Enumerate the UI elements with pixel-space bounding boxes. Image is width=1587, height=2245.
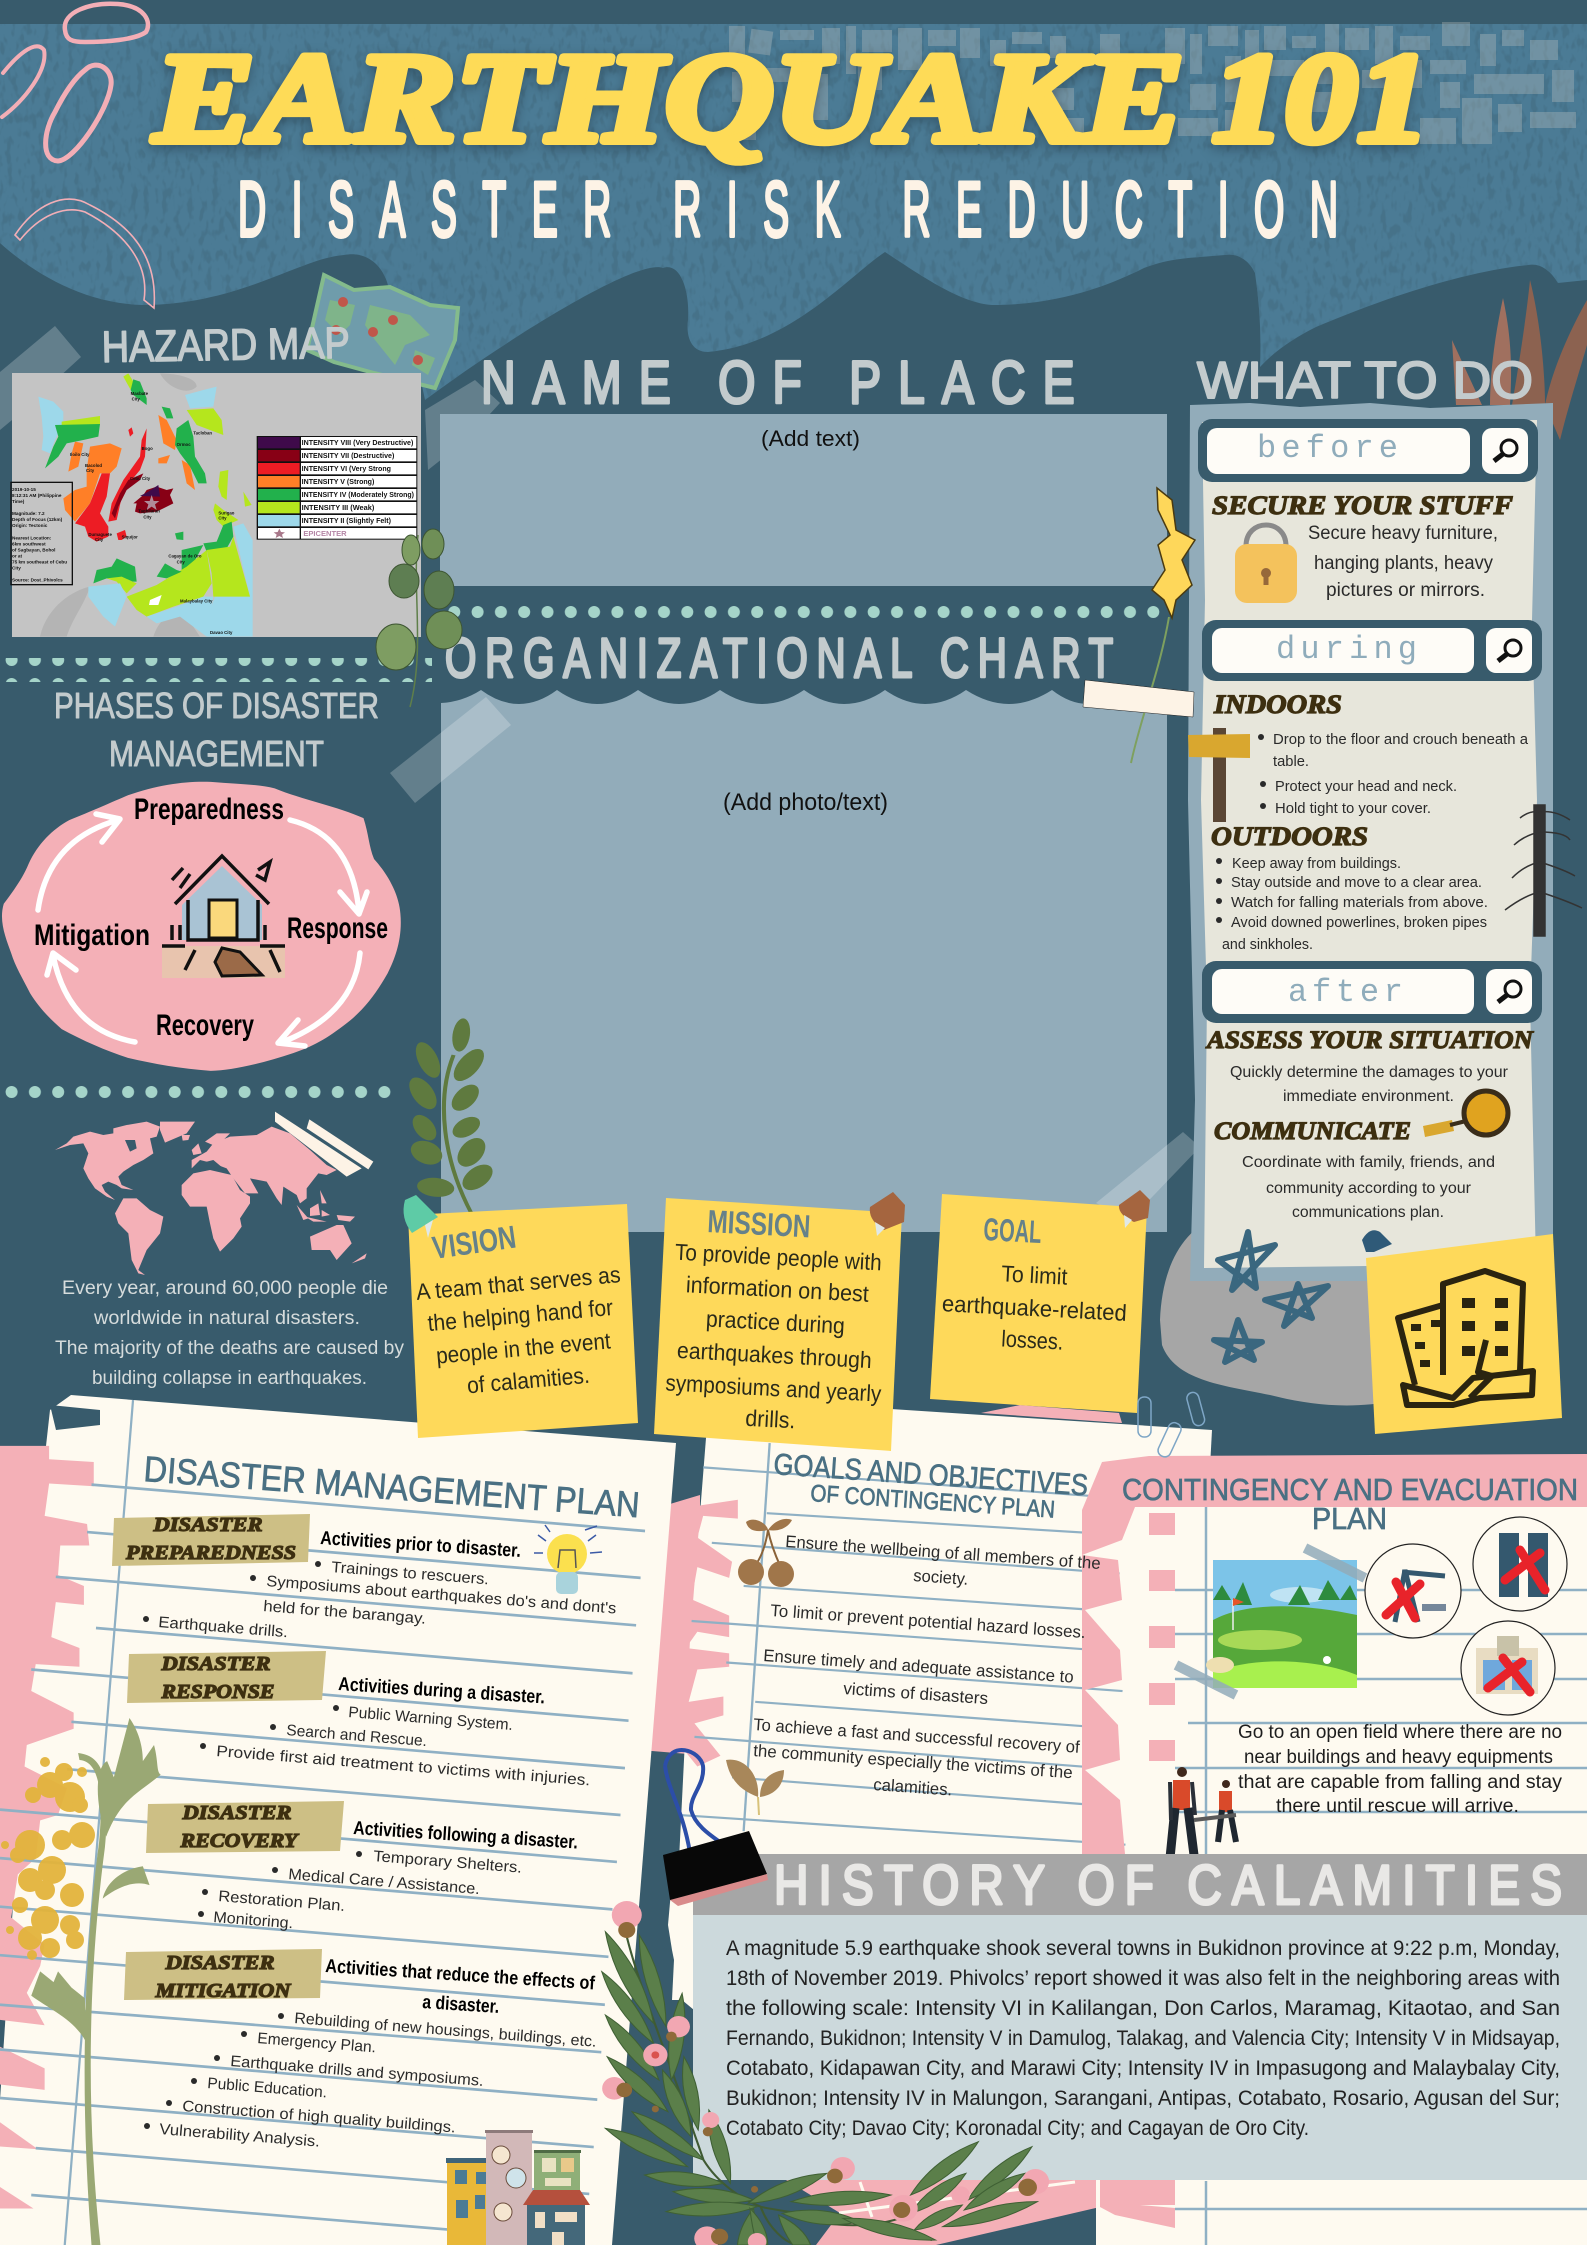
- icon: no palace building: [1461, 1621, 1555, 1715]
- activity headings: [320, 1528, 596, 2018]
- hazard map figure: EPICENTER: [303, 531, 347, 538]
- title: EARTHQUAKE: [153, 27, 1184, 169]
- phases diagram: [2, 782, 401, 1071]
- activity lists: Restoration Plan.: [218, 1888, 346, 1915]
- goals text: calamities.: [873, 1775, 953, 1800]
- phase labels: Preparedness: [134, 793, 284, 826]
- note: vision: people in the event: [435, 1327, 612, 1369]
- panel: history of calamities: [693, 1854, 1587, 2180]
- hazard map figure: Bacolod: [85, 463, 102, 468]
- cycle arrows: [38, 814, 367, 1046]
- search bar: before: before: [1257, 430, 1398, 467]
- hazard map figure: Malaybalay City: [180, 599, 213, 604]
- text: history body: A magnitude 5.9 earthquake shook several towns in Bukidnon province at 9:22 p.m, Monday,: [726, 1937, 1560, 1960]
- hazard map figure: [11, 373, 421, 637]
- text: communicate: communications plan.: [1292, 1204, 1444, 1221]
- search bar: before: [1198, 419, 1538, 482]
- activity headings: Activities that reduce the effects of: [325, 1956, 596, 1994]
- text: every year: building collapse in earthquakes.: [92, 1368, 367, 1389]
- heading: communicate: COMMUNICATE: [1214, 1118, 1411, 1145]
- note: mission: symposiums and yearly: [665, 1369, 882, 1407]
- icon: signpost: [1188, 728, 1250, 822]
- label: response: RESPONSE: [160, 1681, 274, 1703]
- search bar: during: [1202, 620, 1542, 681]
- text: evacuation instructions: Go to an open field where there are no: [1238, 1722, 1562, 1743]
- heading: goals and objectives: [773, 1448, 1089, 1524]
- torn cream strip beside history panel: [668, 1880, 700, 2015]
- paper clips: [1138, 1391, 1206, 1459]
- hazard map figure: 2019-10-15: [12, 487, 36, 492]
- activity lists: Earthquake drills and symposiums.: [230, 2053, 484, 2090]
- hazard map figure: Davao City: [210, 630, 233, 635]
- list: outdoors: Avoid downed powerlines, broken pipes: [1231, 914, 1487, 931]
- list: outdoors: Keep away from buildings.: [1232, 855, 1401, 872]
- pink torn edge: [680, 1443, 1125, 1845]
- heading: indoors: INDOORS: [1213, 690, 1342, 719]
- note: mission: information on best: [685, 1271, 870, 1307]
- text: evacuation instructions: there until rescue will arrive.: [1276, 1796, 1519, 1817]
- pin: brown: [1119, 1190, 1150, 1228]
- search bar: during: during: [1276, 631, 1417, 668]
- header wave band: [0, 24, 1587, 400]
- label: recovery: DISASTER: [181, 1802, 292, 1824]
- heading: hazard map: HAZARD MAP: [101, 319, 350, 372]
- hazard map figure: Tagbilaran: [138, 508, 160, 513]
- hazard map figure: City: [143, 515, 152, 520]
- activity lists: Public Warning System.: [348, 1704, 514, 1734]
- list: indoors: Hold tight to your cover.: [1275, 800, 1431, 817]
- note: goal: To limit: [1001, 1260, 1069, 1290]
- goals text: the community especially the victims of the: [753, 1741, 1073, 1782]
- hazard map figure: Cebu City: [130, 476, 151, 481]
- activity headings: Activities prior to disaster.: [320, 1528, 522, 1562]
- eucalyptus sprig near map: [376, 529, 462, 707]
- activity lists: Earthquake drills.: [158, 1614, 289, 1641]
- hazard map figure: City: [95, 537, 104, 542]
- list: outdoors: Stay outside and move to a clear area.: [1231, 874, 1482, 891]
- title: [153, 27, 1430, 169]
- text: assess: Quickly determine the damages to your: [1230, 1064, 1509, 1081]
- hazard map figure: 75 km southeast of Cebu: [12, 559, 67, 564]
- hazard map figure: Masbate: [131, 391, 149, 396]
- goals text: [753, 1532, 1101, 1800]
- hazard map figure: City: [218, 515, 227, 520]
- heading: organizational chart: ORGANIZATIONAL CHART: [445, 628, 1113, 690]
- goals text: To achieve a fast and successful recovery of: [753, 1715, 1081, 1757]
- activity headings: Activities during a disaster.: [338, 1674, 546, 1708]
- hazard map figure: City: [86, 468, 95, 473]
- note: goal: [930, 1190, 1150, 1413]
- hazard map figure: of Sagbayan, Bohol: [12, 547, 55, 552]
- text: history body: the following scale: Intensity VI in Kalilangan, Don Carlos, Maramag, Kitaotao, and San: [726, 1997, 1560, 2020]
- phase labels: Mitigation: [34, 919, 150, 952]
- hazard map figure: 8:12:31 AM (Philippine: [12, 493, 62, 498]
- hazard map figure: INTENSITY V (Strong): [302, 479, 374, 486]
- note: mission: To provide people with: [674, 1239, 882, 1275]
- activity lists: Monitoring.: [213, 1909, 294, 1932]
- activity lists: held for the barangay.: [263, 1598, 427, 1628]
- list: indoors: Protect your head and neck.: [1275, 778, 1457, 795]
- label: recovery: RECOVERY: [179, 1830, 299, 1852]
- pink strip behind middle paper: [640, 1495, 700, 1755]
- activity lists: Provide first aid treatment to victims with injuries.: [216, 1743, 591, 1789]
- search bar: after: after: [1288, 974, 1403, 1011]
- note: vision: the helping hand for: [427, 1294, 614, 1336]
- goals text: society.: [913, 1566, 969, 1589]
- icon: no tall buildings: [1473, 1517, 1567, 1611]
- text: communicate: community according to your: [1266, 1180, 1472, 1197]
- note: mission: MISSION: [707, 1203, 811, 1244]
- illustration: houses: [446, 2130, 590, 2245]
- text: evacuation instructions: [1238, 1722, 1563, 1817]
- hazard map figure: 6km southwest: [12, 541, 46, 546]
- list: indoors: [1258, 731, 1529, 817]
- lower right paper and pink: [786, 2180, 1587, 2245]
- text: evacuation instructions: near buildings and heavy equipments: [1244, 1747, 1553, 1768]
- hazard map figure: INTENSITY IV (Moderately Strong): [302, 492, 414, 499]
- activity lists: Construction of high quality buildings.: [182, 2098, 456, 2136]
- activity lists: Symposiums about earthquakes do's and dont's: [266, 1573, 617, 1618]
- activity lists: Temporary Shelters.: [373, 1848, 523, 1877]
- label: preparedness: PREPAREDNESS: [125, 1542, 296, 1564]
- hazard map figure: Nearest Location:: [12, 535, 52, 540]
- note: vision: VISION: [430, 1219, 518, 1266]
- label: preparedness: [112, 1514, 310, 1566]
- note: goal: losses.: [1001, 1325, 1064, 1355]
- panel: organizational chart: (Add photo/text): [723, 789, 888, 816]
- heading: goals and objectives: OF CONTINGENCY PLAN: [810, 1480, 1056, 1524]
- illustration: open field: [1206, 1560, 1357, 1688]
- hazard map figure: Origin: Tectonic: [12, 523, 48, 528]
- wheat sprig and stem: [1131, 488, 1195, 763]
- torn pink edge: [0, 1400, 645, 2245]
- hazard map figure: INTENSITY VI (Very Strong: [302, 466, 391, 473]
- goals text: Ensure timely and adequate assistance to: [763, 1646, 1074, 1687]
- heading: phases of disaster management: [54, 685, 379, 774]
- note: vision: of calamities.: [466, 1362, 591, 1398]
- icon: pine tree: [1505, 805, 1582, 936]
- hazard map figure: Magnitude: 7.2: [12, 511, 45, 516]
- hazard map figure: INTENSITY II (Slightly Felt): [302, 518, 391, 525]
- icon: cracked buildings: [1398, 1271, 1533, 1405]
- hazard map figure: INTENSITY VIII (Very Destructive): [302, 440, 413, 447]
- note: vision: A team that serves as: [415, 1261, 622, 1305]
- pink blob: [2, 782, 401, 1071]
- goals text: victims of disasters: [843, 1679, 989, 1708]
- text: evacuation instructions: that are capable from falling and stay: [1238, 1772, 1563, 1793]
- label: preparedness: DISASTER: [152, 1514, 262, 1536]
- label: recovery: [146, 1801, 344, 1853]
- text: history body: Cotabato City; Davao City; Koronadal City; and Cagayan de Oro City.: [726, 2117, 1309, 2140]
- binder clip: [663, 1750, 768, 1906]
- heading: name of place: NAME OF PLACE: [481, 349, 1075, 416]
- cream tape: [1083, 680, 1194, 717]
- hazard map figure: Siquijor: [122, 534, 138, 539]
- mosaic building texture: [729, 22, 1576, 144]
- hazard map figure: Depth of Focus (12km): [12, 517, 63, 522]
- subtitle: DISASTER RISK REDUCTION: [238, 166, 1338, 254]
- activity lists: Rebuilding of new housings, buildings, etc.: [294, 2010, 597, 2051]
- label: response: DISASTER: [160, 1653, 270, 1675]
- icon: light bulb: [534, 1525, 602, 1594]
- tape pieces: [0, 326, 500, 470]
- pin: blue: [1362, 1230, 1392, 1252]
- goals text: Ensure the wellbeing of all members of the: [785, 1532, 1101, 1573]
- list: outdoors: [1216, 855, 1488, 953]
- list: indoors: table.: [1273, 753, 1309, 770]
- heading: outdoors: OUTDOORS: [1211, 822, 1368, 851]
- icon: sprout: [726, 1760, 784, 1815]
- heading: disaster management plan: DISASTER MANAGEMENT PLAN: [142, 1448, 641, 1525]
- panel: name of place: (Add text): [761, 426, 860, 451]
- activity headings: a disaster.: [422, 1992, 500, 2018]
- text: history body: 18th of November 2019. Phivolcs’ report showed it was also felt in the neighboring areas with: [726, 1967, 1560, 1990]
- hazard map figure: City: [12, 565, 21, 570]
- list: indoors: Drop to the floor and crouch beneath a: [1273, 731, 1529, 748]
- text: secure your stuff: Secure heavy furniture,: [1308, 523, 1498, 544]
- phase labels: [34, 793, 388, 1042]
- label: mitigation: DISASTER: [164, 1952, 274, 1974]
- activity lists: Public Education.: [207, 2075, 328, 2101]
- heading: phases of disaster management: MANAGEMENT: [109, 733, 324, 774]
- heading: phases of disaster management: PHASES OF DISASTER: [54, 685, 379, 726]
- panel: contingency and evacuation plan: [1082, 1454, 1587, 1858]
- laurel branch: [404, 1018, 499, 1213]
- grey blob: [1160, 1215, 1400, 1405]
- icon: padlock: [1235, 525, 1297, 603]
- hazard map figure: Time): [12, 499, 25, 504]
- text: assess: [1230, 1064, 1509, 1105]
- mimosa flowers: [1, 1757, 95, 1960]
- heading: what to do: WHAT TO DO: [1197, 352, 1533, 410]
- activity lists: Search and Rescue.: [286, 1722, 428, 1750]
- hazard map figure: Ormoc: [177, 442, 191, 447]
- icon: damaged house: [162, 856, 285, 978]
- search bar: after: [1202, 961, 1542, 1023]
- hazard map figure: INTENSITY III (Weak): [302, 505, 374, 512]
- activity lists: Medical Care / Assistance.: [288, 1866, 480, 1898]
- text: history body: Cotabato, Kidapawan City, and Marawi City; Intensity IV in Impasugong and Malaybalay City,: [726, 2057, 1560, 2080]
- text: secure your stuff: pictures or mirrors.: [1326, 580, 1485, 601]
- icon: no crane: [1365, 1544, 1461, 1638]
- heading: secure your stuff: SECURE YOUR STUFF: [1212, 491, 1513, 520]
- text: communicate: Coordinate with family, friends, and: [1242, 1154, 1495, 1171]
- panel: goals and objectives paper: [672, 1398, 1212, 2000]
- title: 101: [1212, 27, 1430, 169]
- phase labels: Recovery: [156, 1009, 254, 1042]
- pin: green: [404, 1195, 438, 1238]
- hazard map figure: Iloilo City: [70, 452, 90, 457]
- panel: what to do: [1188, 403, 1582, 1281]
- note: vision: [404, 1195, 638, 1438]
- label: mitigation: [124, 1949, 322, 2002]
- activity headings: Activities following a disaster.: [353, 1818, 579, 1854]
- note: goal: earthquake-related: [941, 1290, 1127, 1326]
- heading: assess your situation: ASSESS YOUR SITUATION: [1205, 1027, 1534, 1054]
- text: every year: The majority of the deaths are caused by: [55, 1338, 404, 1359]
- note: goal: GOAL: [983, 1211, 1042, 1250]
- text: every year: worldwide in natural disasters.: [93, 1308, 360, 1329]
- hazard map figure: Surigao: [218, 510, 235, 515]
- phase labels: Response: [287, 912, 388, 945]
- note: collapsed building icon: [1362, 1230, 1562, 1434]
- panel: disaster management plan paper: [0, 1395, 676, 2245]
- goals text: To limit or prevent potential hazard losses.: [770, 1601, 1086, 1642]
- icon: scribbled stars: [1214, 1232, 1328, 1362]
- heading: goals and objectives: GOALS AND OBJECTIVES: [773, 1448, 1089, 1502]
- hazard map figure: Source: Dost_Phivolcs: [12, 578, 63, 583]
- world map: [55, 1112, 373, 1275]
- activity lists: Trainings to rescuers.: [331, 1559, 490, 1588]
- text: history body: Bukidnon; Intensity IV in Malungon, Sarangani, Antipas, Cotabato, Rosario, Agusan del Sur;: [726, 2087, 1560, 2110]
- dotted dividers: [0, 597, 1168, 1103]
- list: outdoors: Watch for falling materials from above.: [1231, 894, 1488, 911]
- heading: contingency and evacuation plan: PLAN: [1312, 1501, 1387, 1536]
- text: assess: immediate environment.: [1283, 1088, 1454, 1105]
- hazard map figure: Cagayan de Oro: [168, 554, 202, 559]
- hazard map figure: City: [177, 559, 185, 564]
- note: mission: [654, 1192, 905, 1451]
- hazard map figure: Tacloban: [193, 431, 212, 436]
- text: secure your stuff: hanging plants, heavy: [1314, 553, 1493, 574]
- label: mitigation: MITIGATION: [154, 1980, 292, 2002]
- hazard map figure: Dumaguete: [88, 532, 112, 537]
- text: secure your stuff: [1308, 523, 1498, 601]
- eucalyptus branch: [602, 1901, 1049, 2245]
- hazard map figure: Bogo: [142, 446, 153, 451]
- hazard map figure: City: [132, 397, 140, 402]
- brown plant behind what to do: [1452, 280, 1587, 440]
- note: mission: practice during: [705, 1305, 846, 1339]
- activity lists: [143, 1559, 617, 2151]
- icon: magnifier: [1423, 1091, 1508, 1137]
- panel: name of place: [440, 414, 1167, 586]
- activity lists: Vulnerability Analysis.: [159, 2121, 321, 2151]
- tape on org chart: [390, 697, 1200, 1220]
- note: mission: drills.: [745, 1405, 796, 1433]
- text: every year: [55, 1278, 404, 1389]
- olive plant: [31, 1718, 161, 2245]
- icon: cherries: [738, 1519, 794, 1587]
- hazard map figure: INTENSITY VII (Destructive): [302, 453, 394, 460]
- illustration: rescue workers: [1170, 1767, 1236, 1858]
- note: mission: earthquakes through: [676, 1337, 872, 1373]
- map icon paper: [307, 275, 458, 388]
- hazard map figure: or at: [12, 553, 23, 558]
- panel: organizational chart: [441, 690, 1167, 1232]
- text: every year: Every year, around 60,000 people die: [62, 1278, 388, 1299]
- band: history heading: HISTORY OF CALAMITIES: [774, 1854, 1562, 1917]
- list: outdoors: and sinkholes.: [1222, 936, 1313, 953]
- text: communicate: [1242, 1154, 1495, 1221]
- heading: contingency and evacuation plan: [1122, 1472, 1578, 1536]
- text: history body: [726, 1937, 1560, 2140]
- tape on field: [1176, 1548, 1365, 1695]
- pink squiggle loops: [2, 4, 154, 308]
- label: response: [127, 1651, 326, 1703]
- pin: brown: [870, 1192, 905, 1236]
- activity lists: Emergency Plan.: [257, 2030, 377, 2056]
